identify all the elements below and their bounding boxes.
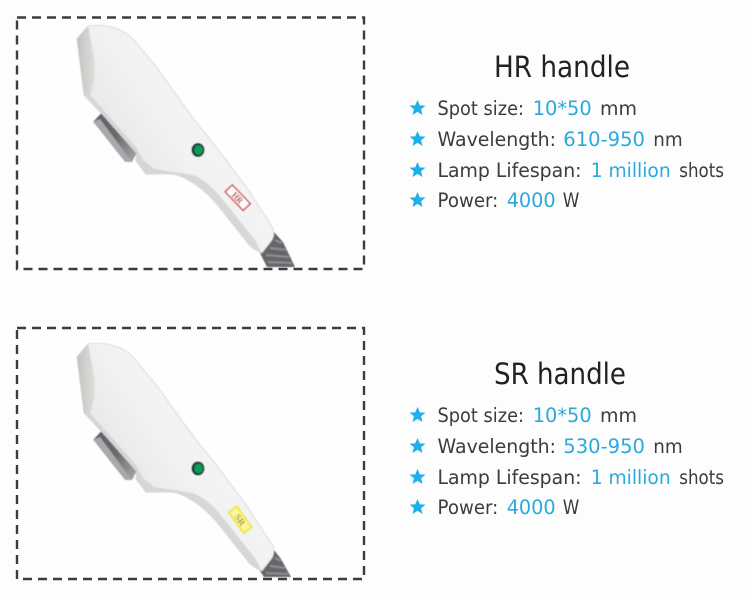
icon: HR handle device	[77, 25, 295, 267]
spec: power: Power:	[438, 496, 498, 519]
spec: power: 4000	[507, 496, 556, 519]
panel: HR handle image frame	[17, 18, 364, 269]
heading: SR handle: SR handle	[494, 357, 626, 391]
spec: wavelength: 530-950	[563, 435, 645, 458]
spec: lamp lifespan: shots	[679, 466, 724, 489]
spec: spot size: 10*50	[533, 404, 592, 427]
list: SR handle specifications	[410, 404, 724, 519]
icon: star	[410, 499, 426, 514]
spec: lamp lifespan: shots	[679, 159, 724, 182]
icon: SR handle device	[77, 343, 291, 577]
icon: star	[410, 407, 426, 422]
spec: lamp lifespan: 1 million	[591, 159, 671, 182]
icon: HR handle device: HR	[230, 190, 246, 206]
spec: wavelength: 610-950	[563, 128, 645, 151]
icon: star	[410, 162, 426, 177]
spec: lamp lifespan: 1 million	[591, 466, 671, 489]
icon: SR handle device: SR	[233, 512, 248, 528]
list: HR handle specifications	[410, 97, 724, 212]
spec: spot size: Spot size:	[438, 97, 524, 120]
icon: star	[410, 100, 426, 115]
spec: power: Power:	[438, 189, 498, 212]
spec: spot size: Spot size:	[438, 404, 524, 427]
heading: HR handle: HR handle	[494, 50, 630, 84]
spec: wavelength: Wavelength:	[438, 128, 556, 151]
icon: star	[410, 438, 426, 453]
spec: lamp lifespan: Lamp Lifespan:	[438, 466, 582, 489]
spec: wavelength: nm	[653, 128, 683, 151]
panel: SR handle image frame	[17, 328, 364, 579]
spec: wavelength: nm	[653, 435, 683, 458]
icon: star	[410, 469, 426, 484]
spec: power: 4000	[507, 189, 556, 212]
spec: lamp lifespan: Lamp Lifespan:	[438, 159, 582, 182]
spec: spot size: mm	[600, 404, 637, 427]
spec: power: W	[563, 496, 579, 519]
spec: wavelength: Wavelength:	[438, 435, 556, 458]
spec: spot size: mm	[600, 97, 637, 120]
icon: star	[410, 192, 426, 207]
spec: power: W	[563, 189, 579, 212]
icon: star	[410, 131, 426, 146]
spec: spot size: 10*50	[533, 97, 592, 120]
